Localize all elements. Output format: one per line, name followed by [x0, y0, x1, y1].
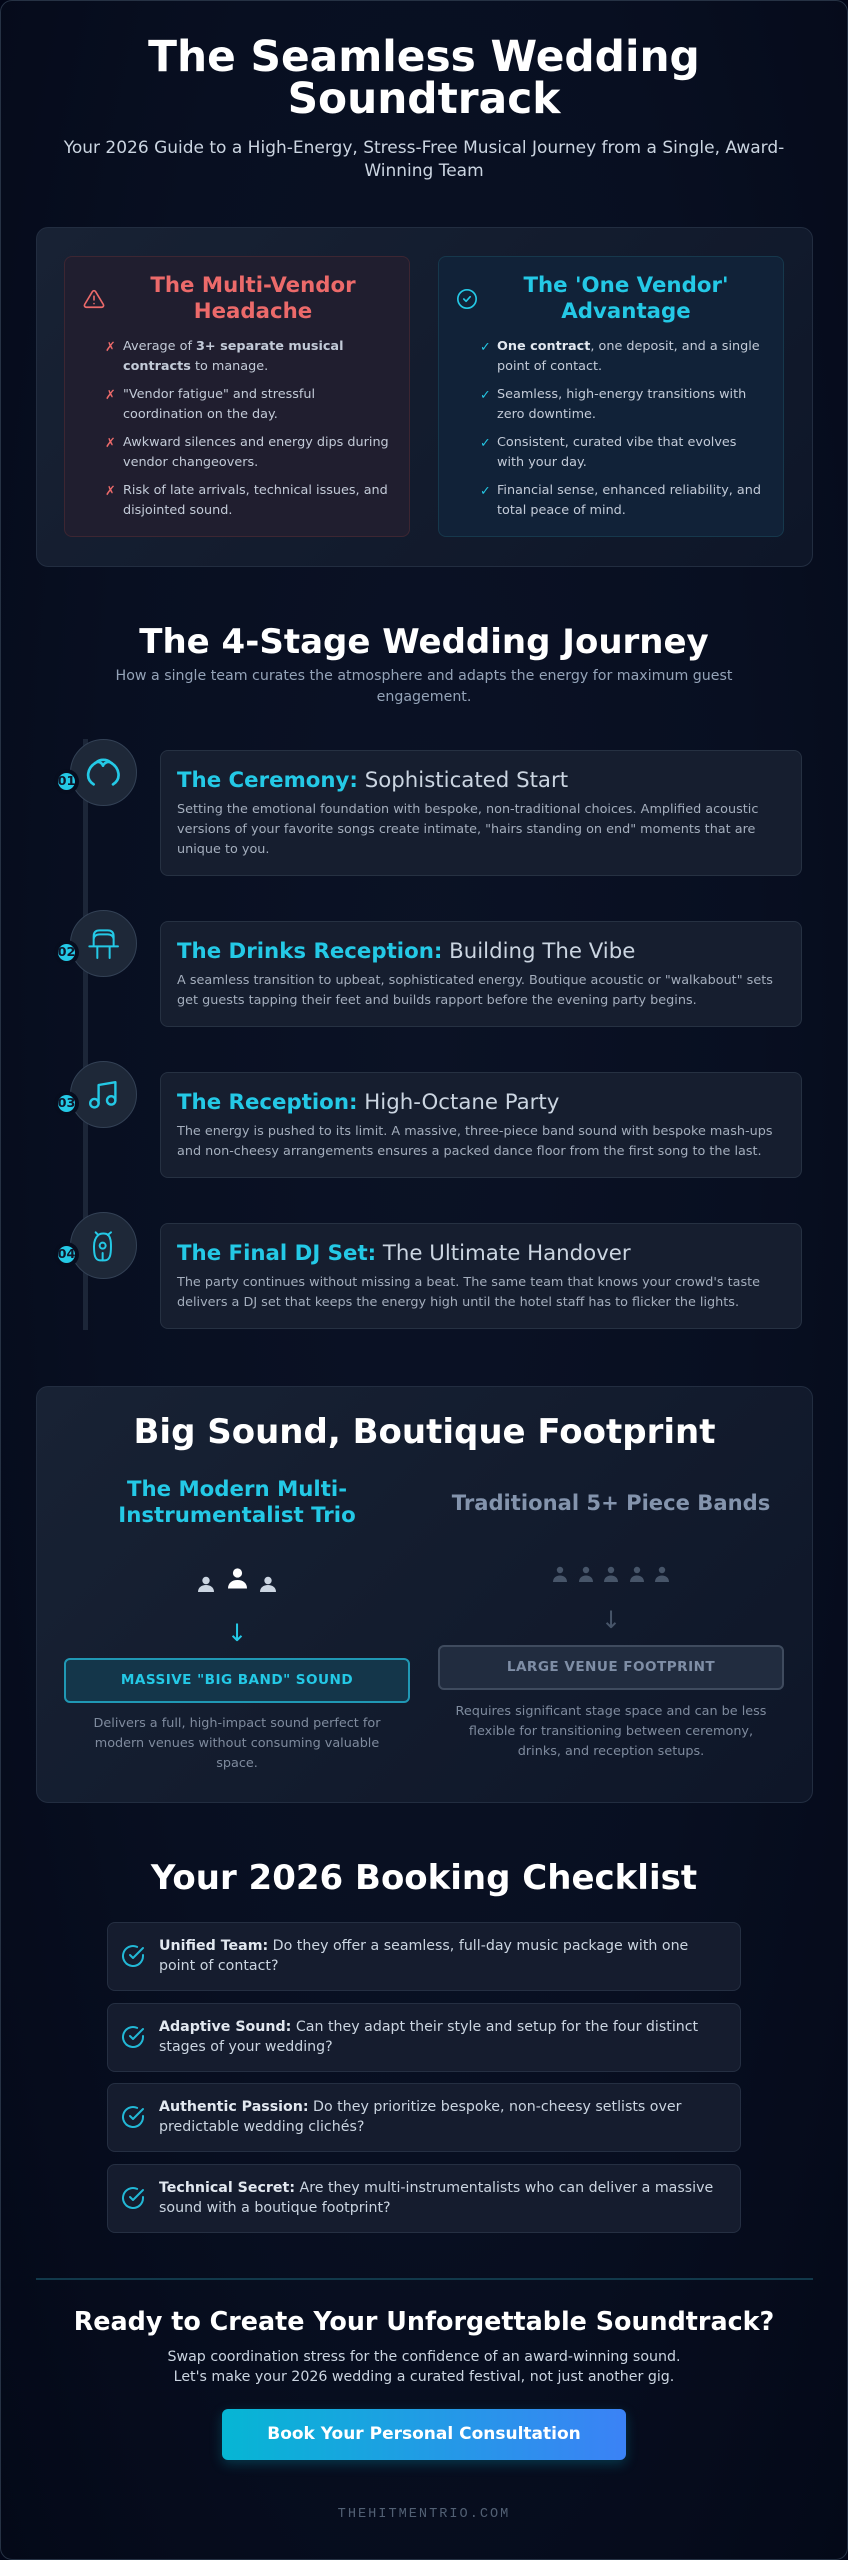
list: problems: Average of 3+ separate musical: [123, 339, 343, 354]
list: problems: [105, 339, 389, 518]
list: problems: Risk of late arrivals, technical issues, and: [123, 483, 388, 498]
item text: Technical Secret: Are they multi-instrumentalists who can deliver a massive: [159, 2180, 713, 2196]
checklist item 2: [107, 2002, 741, 2072]
stage 1 card: [160, 750, 802, 876]
icon: warning triangle: [84, 290, 104, 308]
stage 1 text: unique to you.: [177, 842, 269, 857]
trio heading: [118, 1477, 356, 1528]
stage 3 number: 03: [58, 1096, 75, 1110]
icon: check circle: [457, 289, 477, 309]
item text: [159, 2180, 713, 2216]
column: traditional: [438, 1490, 784, 1759]
item text: [159, 1938, 688, 1974]
stage 2 marker: [70, 910, 137, 977]
list: benefits: ✓: [480, 340, 491, 355]
timeline line: [83, 739, 88, 1330]
stage 4 number: 04: [58, 1246, 75, 1262]
stage 3 card: [160, 1072, 802, 1178]
traditional description: flexible for transitioning between ceremony,: [469, 1724, 753, 1739]
item text: [159, 2018, 698, 2054]
list: problems: ✗: [105, 340, 116, 355]
stage 4 marker: [70, 1212, 137, 1279]
call to action text: Let's make your 2026 wedding a curated festival, not just another gig.: [174, 2369, 674, 2385]
panel: comparison: [36, 227, 813, 567]
heading: one vendor advantage: [523, 273, 728, 324]
box: big band sound: [64, 1658, 410, 1703]
icon: check: [122, 1945, 144, 1967]
list: benefits: with your day.: [497, 455, 587, 470]
list: problems: Awkward silences and energy dips during: [123, 435, 389, 450]
subtitle: [64, 138, 784, 181]
stage 1 marker: [70, 739, 137, 806]
column: trio: [64, 1477, 410, 1771]
stage 2 text: A seamless transition to upbeat, sophisticated energy. Boutique acoustic or "walkabout" sets: [177, 973, 773, 988]
icon: dj speaker: [93, 1231, 112, 1262]
journey subtitle: [116, 668, 732, 705]
list: problems: vendor changeovers.: [123, 455, 258, 470]
icon: check: [122, 2106, 144, 2128]
traditional description: drinks, and reception setups.: [518, 1744, 704, 1759]
stage 3 text: and non-cheesy arrangements ensures a packed dance floor from the first song to the last.: [177, 1144, 762, 1159]
heading: one vendor advantage: Advantage: [561, 299, 691, 324]
stage 2 card: [160, 921, 802, 1027]
icon: check: [122, 2187, 144, 2209]
heading: journey: The 4-Stage Wedding Journey: [139, 622, 709, 662]
heading: one vendor advantage: The 'One Vendor': [523, 273, 728, 298]
stage 4 text: [176, 1275, 760, 1310]
subtitle: Winning Team: [364, 161, 484, 181]
call to action text: Swap coordination stress for the confidence of an award-winning sound.: [168, 2349, 680, 2365]
arrow: down: ↓: [601, 1606, 621, 1634]
list: benefits: Seamless, high-energy transitions with: [497, 387, 746, 402]
list: problems: coordination on the day.: [123, 407, 278, 422]
list: benefits: ✓: [480, 388, 491, 403]
list: benefits: zero downtime.: [497, 407, 596, 422]
title: The Seamless Wedding: [148, 32, 700, 81]
call to action text: [168, 2349, 680, 2385]
journey subtitle: How a single team curates the atmosphere and adapts the energy for maximum guest: [116, 668, 732, 684]
title: [148, 32, 700, 123]
stage 1 title: The Ceremony: Sophisticated Start: [177, 768, 568, 793]
stage 2 title: The Drinks Reception: Building The Vibe: [177, 939, 635, 964]
list: benefits: ✓: [480, 484, 491, 499]
button: book consultation: Book Your Personal Consultation: [267, 2424, 581, 2444]
button: book consultation: [222, 2409, 626, 2460]
checklist item 1: [107, 1922, 741, 1991]
list: problems: "Vendor fatigue" and stressful: [123, 387, 315, 402]
journey subtitle: engagement.: [377, 689, 471, 705]
icon: five people: [553, 1566, 669, 1582]
list: problems: disjointed sound.: [123, 503, 232, 518]
item text: Adaptive Sound: Can they adapt their style and setup for the four distinct: [159, 2018, 698, 2034]
heading: checklist: Your 2026 Booking Checklist: [151, 1858, 697, 1898]
icon: ceremony: [86, 758, 120, 786]
stage 1 number: 01: [58, 774, 75, 788]
item text: Unified Team: Do they offer a seamless, full-day music package with one: [159, 1938, 688, 1954]
title: Soundtrack: [288, 74, 560, 123]
checklist item 3: [107, 2083, 741, 2152]
item text: Authentic Passion: Do they prioritize bespoke, non-cheesy setlists over: [159, 2099, 681, 2115]
trio description: [94, 1716, 380, 1771]
heading: big sound: Big Sound, Boutique Footprint: [134, 1412, 715, 1452]
stage 4 text: The party continues without missing a beat. The same team that knows your crowd's taste: [177, 1275, 760, 1290]
list: problems: ✗: [105, 436, 116, 451]
traditional description: [456, 1704, 766, 1759]
item text: sound with a boutique footprint?: [159, 2200, 391, 2216]
list: problems: contracts to manage.: [123, 359, 268, 374]
list: benefits: Consistent, curated vibe that evolves: [497, 435, 736, 450]
stage 3 marker: [70, 1061, 137, 1128]
icon: check: [122, 2026, 144, 2048]
list: benefits: point of contact.: [497, 359, 602, 374]
trio description: Delivers a full, high-impact sound perfect for: [94, 1716, 380, 1731]
stage 1 text: [177, 802, 758, 857]
trio description: space.: [216, 1756, 258, 1771]
heading: multi-vendor headache: [150, 273, 356, 324]
box: large venue footprint: [438, 1645, 784, 1690]
stage 2 text: get guests tapping their feet and builds rapport before the evening party begins.: [177, 993, 697, 1008]
item text: stages of your wedding?: [159, 2038, 333, 2054]
checklist item 4: [107, 2164, 741, 2232]
panel: big sound: [36, 1386, 813, 1803]
arrow: down: ↓: [227, 1619, 247, 1647]
stage 4 text: delivers a DJ set that keeps the energy high until the hotel staff has to flicker the lights.: [177, 1295, 739, 1310]
icon: music note: [89, 1081, 117, 1109]
stage 2 number: 02: [58, 944, 75, 960]
item text: point of contact?: [159, 1958, 278, 1974]
box: big band sound: MASSIVE "BIG BAND" SOUND: [121, 1672, 353, 1688]
heading: call to action: Ready to Create Your Unforgettable Soundtrack?: [74, 2306, 774, 2336]
heading: multi-vendor headache: The Multi-Vendor: [150, 273, 356, 298]
trio heading: Instrumentalist Trio: [118, 1503, 356, 1528]
subtitle: Your 2026 Guide to a High-Energy, Stress-Free Musical Journey from a Single, Award-: [64, 138, 784, 158]
box: large venue footprint: LARGE VENUE FOOTPRINT: [507, 1659, 715, 1675]
trio description: modern venues without consuming valuable: [95, 1736, 379, 1751]
stage 4 card: [160, 1223, 802, 1329]
list: benefits: One contract, one deposit, and a single: [497, 339, 760, 354]
icon: drinks table: [88, 929, 119, 959]
trio heading: The Modern Multi-: [127, 1477, 347, 1502]
stage 2 text: [177, 973, 773, 1008]
stage 3 title: The Reception: High-Octane Party: [177, 1090, 559, 1115]
heading: multi-vendor headache: Headache: [194, 299, 312, 324]
traditional description: Requires significant stage space and can be less: [456, 1704, 766, 1719]
stage 3 text: [176, 1124, 773, 1159]
traditional heading: Traditional 5+ Piece Bands: [452, 1490, 770, 1515]
list: benefits: total peace of mind.: [497, 503, 626, 518]
list: benefits: Financial sense, enhanced reliability, and: [497, 483, 761, 498]
stage 1 text: versions of your favorite songs create intimate, "hairs standing on end" moments that are: [177, 822, 755, 837]
footer url: THEHITMENTRIO.COM: [338, 2507, 510, 2522]
list: problems: ✗: [105, 484, 116, 499]
item text: [159, 2099, 682, 2135]
list: benefits: [480, 339, 761, 518]
icon: three people: [198, 1568, 276, 1592]
card: multi-vendor headache: [64, 256, 410, 537]
stage 1 text: Setting the emotional foundation with bespoke, non-traditional choices. Amplified acoustic: [177, 802, 758, 817]
stage 4 title: The Final DJ Set: The Ultimate Handover: [177, 1241, 631, 1266]
stage 3 text: The energy is pushed to its limit. A massive, three-piece band sound with bespoke mash-ups: [177, 1124, 773, 1139]
list: problems: ✗: [105, 388, 116, 403]
item text: predictable wedding clichés?: [159, 2119, 364, 2135]
card: one vendor advantage: [438, 256, 784, 537]
list: benefits: ✓: [480, 436, 491, 451]
